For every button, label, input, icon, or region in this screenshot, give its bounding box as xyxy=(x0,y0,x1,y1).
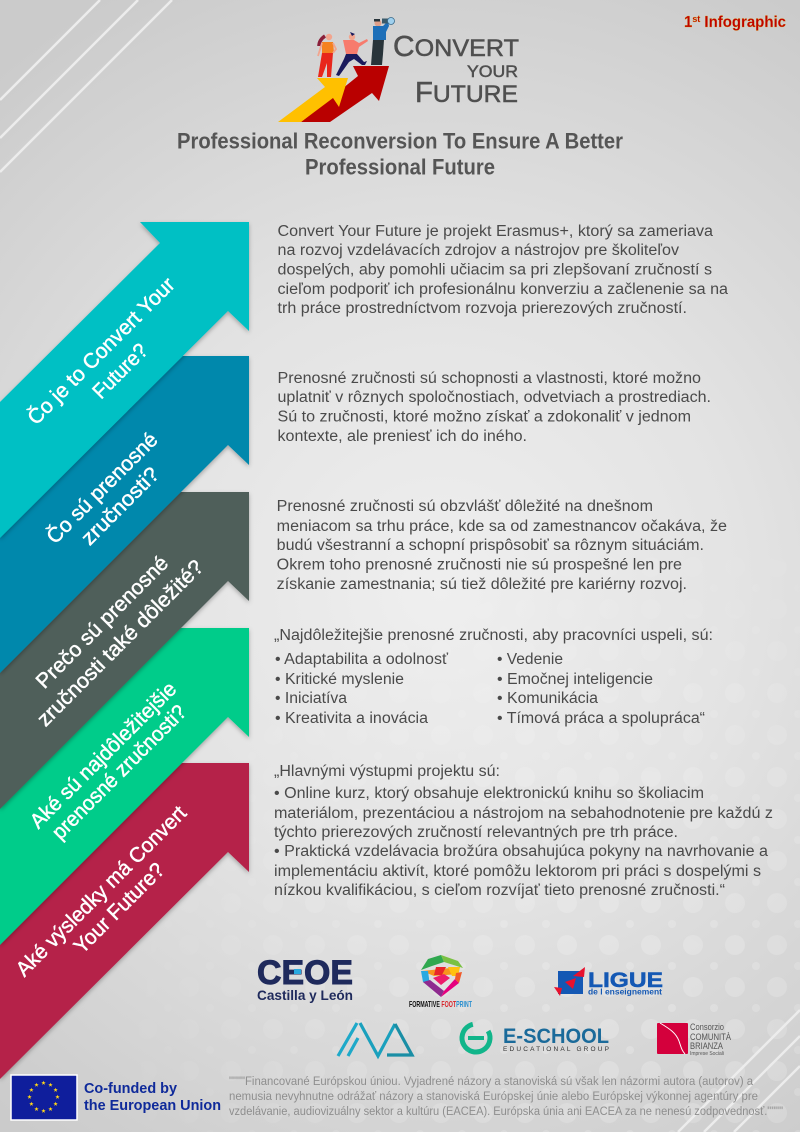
text block: why they are important: Okrem toho prenosné zručnosti nie sú prospešné len pre xyxy=(277,556,682,574)
text block: most important skills list: • Kritické myslenie xyxy=(275,671,404,688)
text block: most important skills list: • Kreativita a inovácia xyxy=(275,710,428,727)
logo: Ligue de l'enseignement xyxy=(554,967,663,996)
text: Co-funded by the European Union xyxy=(84,1081,221,1114)
wordmark: FORMATIVE FOOTPRINT xyxy=(409,999,473,1009)
text block: most important skills list: • Emočnej inteligencie xyxy=(497,671,653,688)
title xyxy=(177,128,623,180)
icon: three people xyxy=(318,18,394,77)
text block: project outputs: „Hlavnými výstupmi projektu sú: xyxy=(274,763,500,780)
arrow: Čo sú prenosné zručnosti? xyxy=(0,356,249,673)
text block: about the project xyxy=(278,223,728,317)
logo: E-School: EDUCATIONAL GROUP xyxy=(503,1046,609,1053)
text block: project outputs: • Online kurz, ktorý obsahuje elektronickú knihu so školiacim xyxy=(274,785,704,802)
text block: most important skills list: • Komunikácia xyxy=(497,690,598,707)
label: 1st Infographic: Infographic xyxy=(700,14,786,31)
arrow: Čo je to Convert Your Future?: Čo je to Convert Your xyxy=(23,273,180,430)
logo: Ligue de l'enseignement: LIGUE xyxy=(588,969,663,992)
text block: about the project: Convert Your Future je projekt Erasmus+, ktorý sa zameriava xyxy=(278,223,713,240)
logo wordmark: YOUR xyxy=(467,62,518,81)
arrow: Aké výsledky má Convert Your Future?: Your Future? xyxy=(70,859,169,958)
logo: Ligue de l'enseignement: de l enseignement xyxy=(588,988,662,996)
logo: Consorzio Comunità Brianza: Consorzio xyxy=(690,1022,724,1033)
logo: AIVA xyxy=(338,1023,412,1056)
label: 1st Infographic: st xyxy=(692,14,701,25)
text block: why they are important xyxy=(277,498,727,593)
title: Professional Reconversion To Ensure A Better xyxy=(177,128,623,154)
logo wordmark xyxy=(393,31,519,109)
text block: most important skills list: • Vedenie xyxy=(497,651,563,668)
logo: Formative Footprint xyxy=(409,955,473,1009)
text block: about the project: cieľom podporiť ich profesionálnu konverziu a začlenenie sa na xyxy=(278,281,728,298)
text block: most important skills list: „Najdôležitejšie prenosné zručnosti, aby pracovníci uspeli, sú: xyxy=(274,627,713,644)
text block: project outputs: implementáciu aktivít, ktoré pomôžu lektorom pri práci s dospelými s xyxy=(274,863,761,880)
arrow: Aké sú najdôležitejšie prenosné zručnosti?: prenosné zručnosti? xyxy=(48,701,191,844)
title: Professional Future xyxy=(305,154,495,180)
text block: why they are important: Prenosné zručnosti sú obzvlášť dôležité na dnešnom xyxy=(277,498,653,515)
logo: EU flag xyxy=(11,1075,77,1120)
logo: CEOE Castilla y León: Castilla y León xyxy=(257,987,353,1003)
logo: CEOE Castilla y León: CEOE xyxy=(257,954,353,992)
icon: yellow arrow xyxy=(278,78,348,122)
text: EU disclaimer xyxy=(229,1074,783,1118)
arrow: Prečo sú prenosné zručnosti také dôležité? xyxy=(0,492,249,809)
text block: project outputs: týchto prierezových zručností relevantných pre trh práce. xyxy=(274,824,678,841)
text block: about the project: trh práce prostredníctvom rozvoja prierezových zručností. xyxy=(278,300,687,317)
logo: Consorzio Comunità Brianza: Imprese Sociali xyxy=(690,1051,724,1057)
text block: project outputs: • Praktická vzdelávacia brožúra obsahujúca pokyny na navrhovanie a xyxy=(274,843,768,860)
logo: Consorzio Comunità Brianza xyxy=(657,1022,732,1057)
logo: E-School: E-SCHOOL xyxy=(503,1025,609,1048)
arrow: Aké sú najdôležitejšie prenosné zručnosti? xyxy=(0,628,249,945)
arrow: Aké výsledky má Convert Your Future?: Aké výsledky má Convert xyxy=(12,801,191,981)
logo: Consorzio Comunità Brianza: COMUNITÀ xyxy=(690,1032,732,1043)
arrow: Aké výsledky má Convert Your Future? xyxy=(0,763,249,1079)
arrow: Čo sú prenosné zručnosti?: zručnosti? xyxy=(77,463,164,550)
label: 1st Infographic: 1 xyxy=(684,14,693,31)
text block: project outputs: materiálom, prezentáciou a nástrojom na sebahodnotenie pre každú z xyxy=(274,805,773,822)
text block: most important skills list: • Tímová práca a spolupráca“ xyxy=(497,710,705,727)
text block: what are transferable skills: uplatniť v rôznych spoločnostiach, odvetviach a prostrediach. xyxy=(278,389,711,406)
text block: why they are important: získanie zamestnania; sú tiež dôležité pre kariérny rozvoj. xyxy=(277,576,687,593)
logo: Consorzio Comunità Brianza: BRIANZA xyxy=(690,1041,724,1052)
text: Co-funded by the European Union: Co-funded by xyxy=(84,1081,177,1097)
text block: about the project: dospelých, aby pomohli učiacim sa pri zlepšovaní zručností s xyxy=(278,262,712,278)
text block: why they are important: budú všestranní a schopní prispôsobiť sa rôznym situáciám. xyxy=(277,537,704,554)
text block: what are transferable skills: Sú to zručnosti, ktoré možno získať a zdokonaliť v jednom xyxy=(278,408,691,426)
text block: what are transferable skills: kontexte, ale preniesť ich do iného. xyxy=(278,428,527,445)
logo wordmark: CONVERT xyxy=(393,31,519,63)
text block: most important skills list xyxy=(274,627,713,727)
logo: E-School xyxy=(457,1019,609,1057)
text: Co-funded by the European Union: the European Union xyxy=(84,1098,221,1114)
text: EU disclaimer: """"Financované Európskou úniou. Vyjadrené názory a stanoviská sú však len názormi autora (autorov) a xyxy=(229,1074,753,1088)
logo: Convert Your Future xyxy=(278,18,519,122)
text block: project outputs: nízkou kvalifikáciou, s cieľom rozvíjať tieto prenosné zručnosti.“ xyxy=(274,882,725,899)
arrow: Prečo sú prenosné zručnosti také dôležité?: zručnosti také dôležité? xyxy=(33,556,208,731)
arrow: Čo sú prenosné zručnosti?: Čo sú prenosné xyxy=(42,428,163,549)
text: EU disclaimer: nemusia nevyhnutne odrážať názory a stanoviská Európskej únie alebo Európskej výkonnej agentúry pre xyxy=(229,1089,758,1103)
icon: red arrow xyxy=(301,66,389,122)
text block: what are transferable skills: Prenosné zručnosti sú schopnosti a vlastnosti, ktoré možno xyxy=(278,370,701,387)
text block: about the project: na rozvoj vzdelávacích zdrojov a nástrojov pre školiteľov xyxy=(278,242,679,259)
arrow: Prečo sú prenosné zručnosti také dôležité?: Prečo sú prenosné xyxy=(32,552,173,693)
text block: most important skills list: • Iniciatíva xyxy=(275,690,347,707)
text block: project outputs xyxy=(274,763,773,899)
text block: why they are important: meniacom sa trhu práce, kde sa od zamestnancov očakáva, že xyxy=(277,518,727,535)
arrow: Čo je to Convert Your Future? xyxy=(0,222,249,538)
text block: what are transferable skills xyxy=(278,370,711,445)
arrow: Aké sú najdôležitejšie prenosné zručnosti?: Aké sú najdôležitejšie xyxy=(26,678,181,833)
logo wordmark: FUTURE xyxy=(415,77,518,109)
text block: most important skills list: • Adaptabilita a odolnosť xyxy=(275,651,448,668)
arrow: Čo je to Convert Your Future?: Future? xyxy=(88,339,153,404)
